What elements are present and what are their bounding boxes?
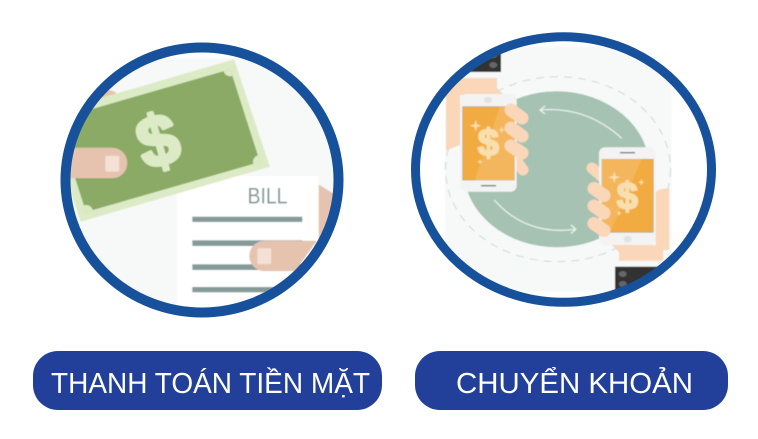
icon: right hand xyxy=(612,188,669,261)
dollar sign: $ xyxy=(617,176,638,218)
icon: right phone fingers xyxy=(594,188,604,230)
dollar sign: $ xyxy=(478,123,499,165)
dashed orbit xyxy=(446,77,670,262)
icon: left thumb holding banknote xyxy=(70,147,128,179)
arrow: top xyxy=(540,106,622,138)
circle border xyxy=(416,37,712,302)
green disc xyxy=(464,91,650,247)
icon: top sleeve xyxy=(470,54,502,73)
circle border xyxy=(66,48,338,312)
transfer scene artwork xyxy=(445,40,672,299)
bill heading: BILL xyxy=(248,184,288,208)
panel: cash payment illustration xyxy=(45,48,345,320)
label: bank transfer xyxy=(415,351,728,410)
icon: paper bill xyxy=(179,176,320,293)
arrow: bottom xyxy=(494,200,576,234)
dollar sign: $ xyxy=(128,98,188,185)
icon: left phone xyxy=(460,94,517,192)
icon: left hand xyxy=(446,78,504,150)
icon: right thumb on bill xyxy=(249,241,317,271)
label: cash payment xyxy=(33,351,382,410)
icon: bottom sleeve xyxy=(614,266,658,290)
icon: hand behind banknote xyxy=(101,90,116,98)
icon: banknote xyxy=(70,59,270,222)
infographic canvas xyxy=(33,32,728,410)
label: cash payment: THANH TOÁN TIỀN MẶT xyxy=(51,366,370,400)
icon: left phone fingers xyxy=(511,110,522,153)
label: bank transfer: CHUYỂN KHOẢN xyxy=(456,366,693,400)
icon: right phone fourth finger xyxy=(592,168,601,176)
cash scene artwork xyxy=(70,58,333,293)
icon: left phone fourth finger xyxy=(516,160,523,170)
icon: right phone xyxy=(599,147,656,245)
panel: bank transfer illustration xyxy=(416,37,712,302)
icon: hand behind bill xyxy=(318,184,333,240)
